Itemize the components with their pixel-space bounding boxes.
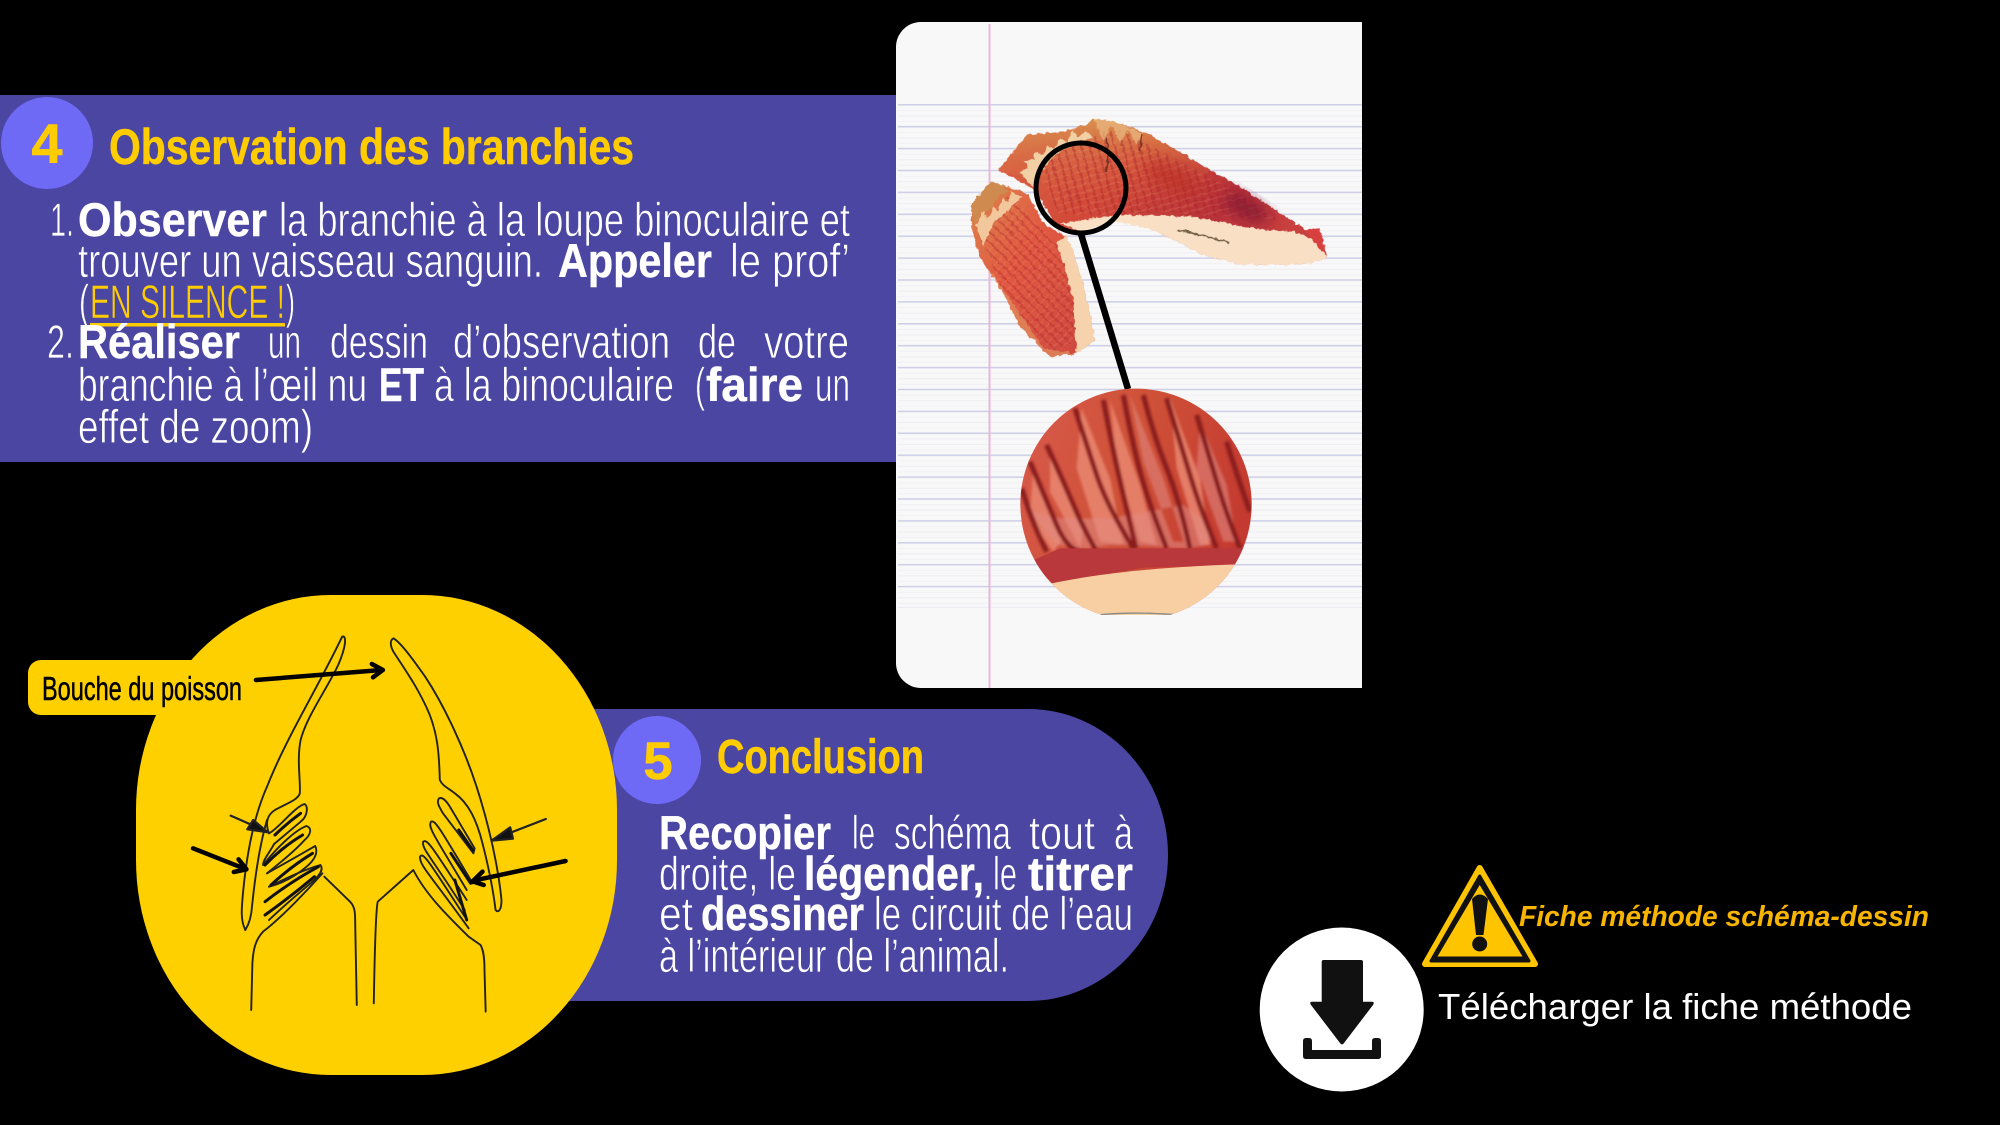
text block: instructions: Observer [78, 193, 267, 246]
arrow: bouche [256, 664, 383, 680]
arrow: upper left thin [231, 816, 268, 832]
text block: conclusion instructions: tout [1029, 806, 1095, 859]
text block: conclusion instructions: le [852, 806, 875, 859]
text block: conclusion instructions: Recopier [659, 806, 831, 859]
text block: conclusion instructions: à l’intérieur de l’animal. [659, 929, 1009, 982]
text block: instructions: Appeler [558, 234, 712, 287]
panel: yellow fish mouth schema [28, 595, 617, 1075]
arrow: upper right thin [492, 819, 546, 841]
badge: number 4 [1, 97, 93, 189]
text block: instructions: le prof’ [730, 234, 850, 287]
arrow: left bold [193, 848, 246, 872]
text block: instructions: branchie à l’œil nu [78, 358, 367, 411]
text block: conclusion instructions: schéma [894, 806, 1012, 859]
text: telecharger la fiche methode: Télécharger la fiche méthode [1438, 986, 1912, 1027]
panel: notebook paper with gill [896, 22, 1362, 688]
text block: instructions: effet de zoom) [78, 400, 313, 453]
text block: conclusion instructions: à [1114, 806, 1134, 859]
badge: number 5 [613, 716, 701, 804]
text block: instructions: 1. [50, 193, 74, 246]
text block: instructions [47, 193, 850, 453]
text block: instructions: de [698, 315, 736, 368]
label: bouche du poisson: Bouche du poisson [42, 670, 242, 707]
text block: instructions: EN SILENCE ! [90, 275, 285, 328]
heading: observation des branchies: Observation des branchies [109, 119, 634, 175]
heading: conclusion: Conclusion [717, 731, 924, 784]
icon: warning triangle [1425, 868, 1535, 964]
zoomed gill detail [1020, 388, 1252, 615]
icon: download button [1260, 928, 1424, 1092]
text block: instructions: dessin [330, 315, 428, 368]
photo: fish gill [970, 118, 1327, 357]
leader line [1081, 234, 1128, 389]
panel: step 4 observation [0, 95, 900, 462]
text block: instructions: ) [286, 275, 295, 328]
text block: instructions: faire [706, 358, 803, 411]
panel: step 5 conclusion [560, 709, 1168, 1001]
badge: number 5: 5 [643, 732, 673, 791]
text block: conclusion instructions: légender, [804, 847, 984, 900]
text block: instructions: un [815, 358, 850, 411]
label: bouche du poisson [28, 660, 242, 715]
text block: conclusion instructions: le [993, 847, 1017, 900]
callout: fiche methode title: Fiche méthode schéma-dessin [1519, 901, 1929, 933]
text block: conclusion instructions: le circuit de l’eau [874, 887, 1133, 940]
cream cartilage band [1060, 215, 1327, 265]
schema: gill drawing [193, 637, 566, 1012]
text block: instructions: trouver un vaisseau sanguin. [78, 234, 543, 287]
text block: conclusion instructions: droite, le [659, 847, 796, 900]
text block: instructions: ( [695, 358, 705, 411]
text block: instructions: à la binoculaire [434, 358, 674, 411]
text block: conclusion instructions [659, 806, 1134, 982]
text block: instructions: d’observation [453, 315, 670, 368]
text block: instructions: 2. [47, 315, 74, 368]
text block: instructions: la branchie à la loupe binoculaire et [279, 193, 850, 246]
text block: instructions: un [268, 315, 301, 368]
text block: instructions: Réaliser [78, 315, 240, 368]
upper lobe [998, 118, 1327, 265]
lower lobe [970, 182, 1095, 357]
text block: instructions: ET [379, 358, 424, 411]
text block: conclusion instructions: dessiner [701, 887, 864, 940]
text block: conclusion instructions: titrer [1028, 847, 1133, 900]
text block: conclusion instructions: et [659, 887, 693, 940]
badge: number 4: 4 [31, 112, 63, 175]
text block: instructions: ( [79, 275, 89, 328]
magnifier ring [1036, 143, 1126, 233]
arrow: right bold [473, 861, 566, 885]
text block: instructions: votre [764, 315, 849, 368]
